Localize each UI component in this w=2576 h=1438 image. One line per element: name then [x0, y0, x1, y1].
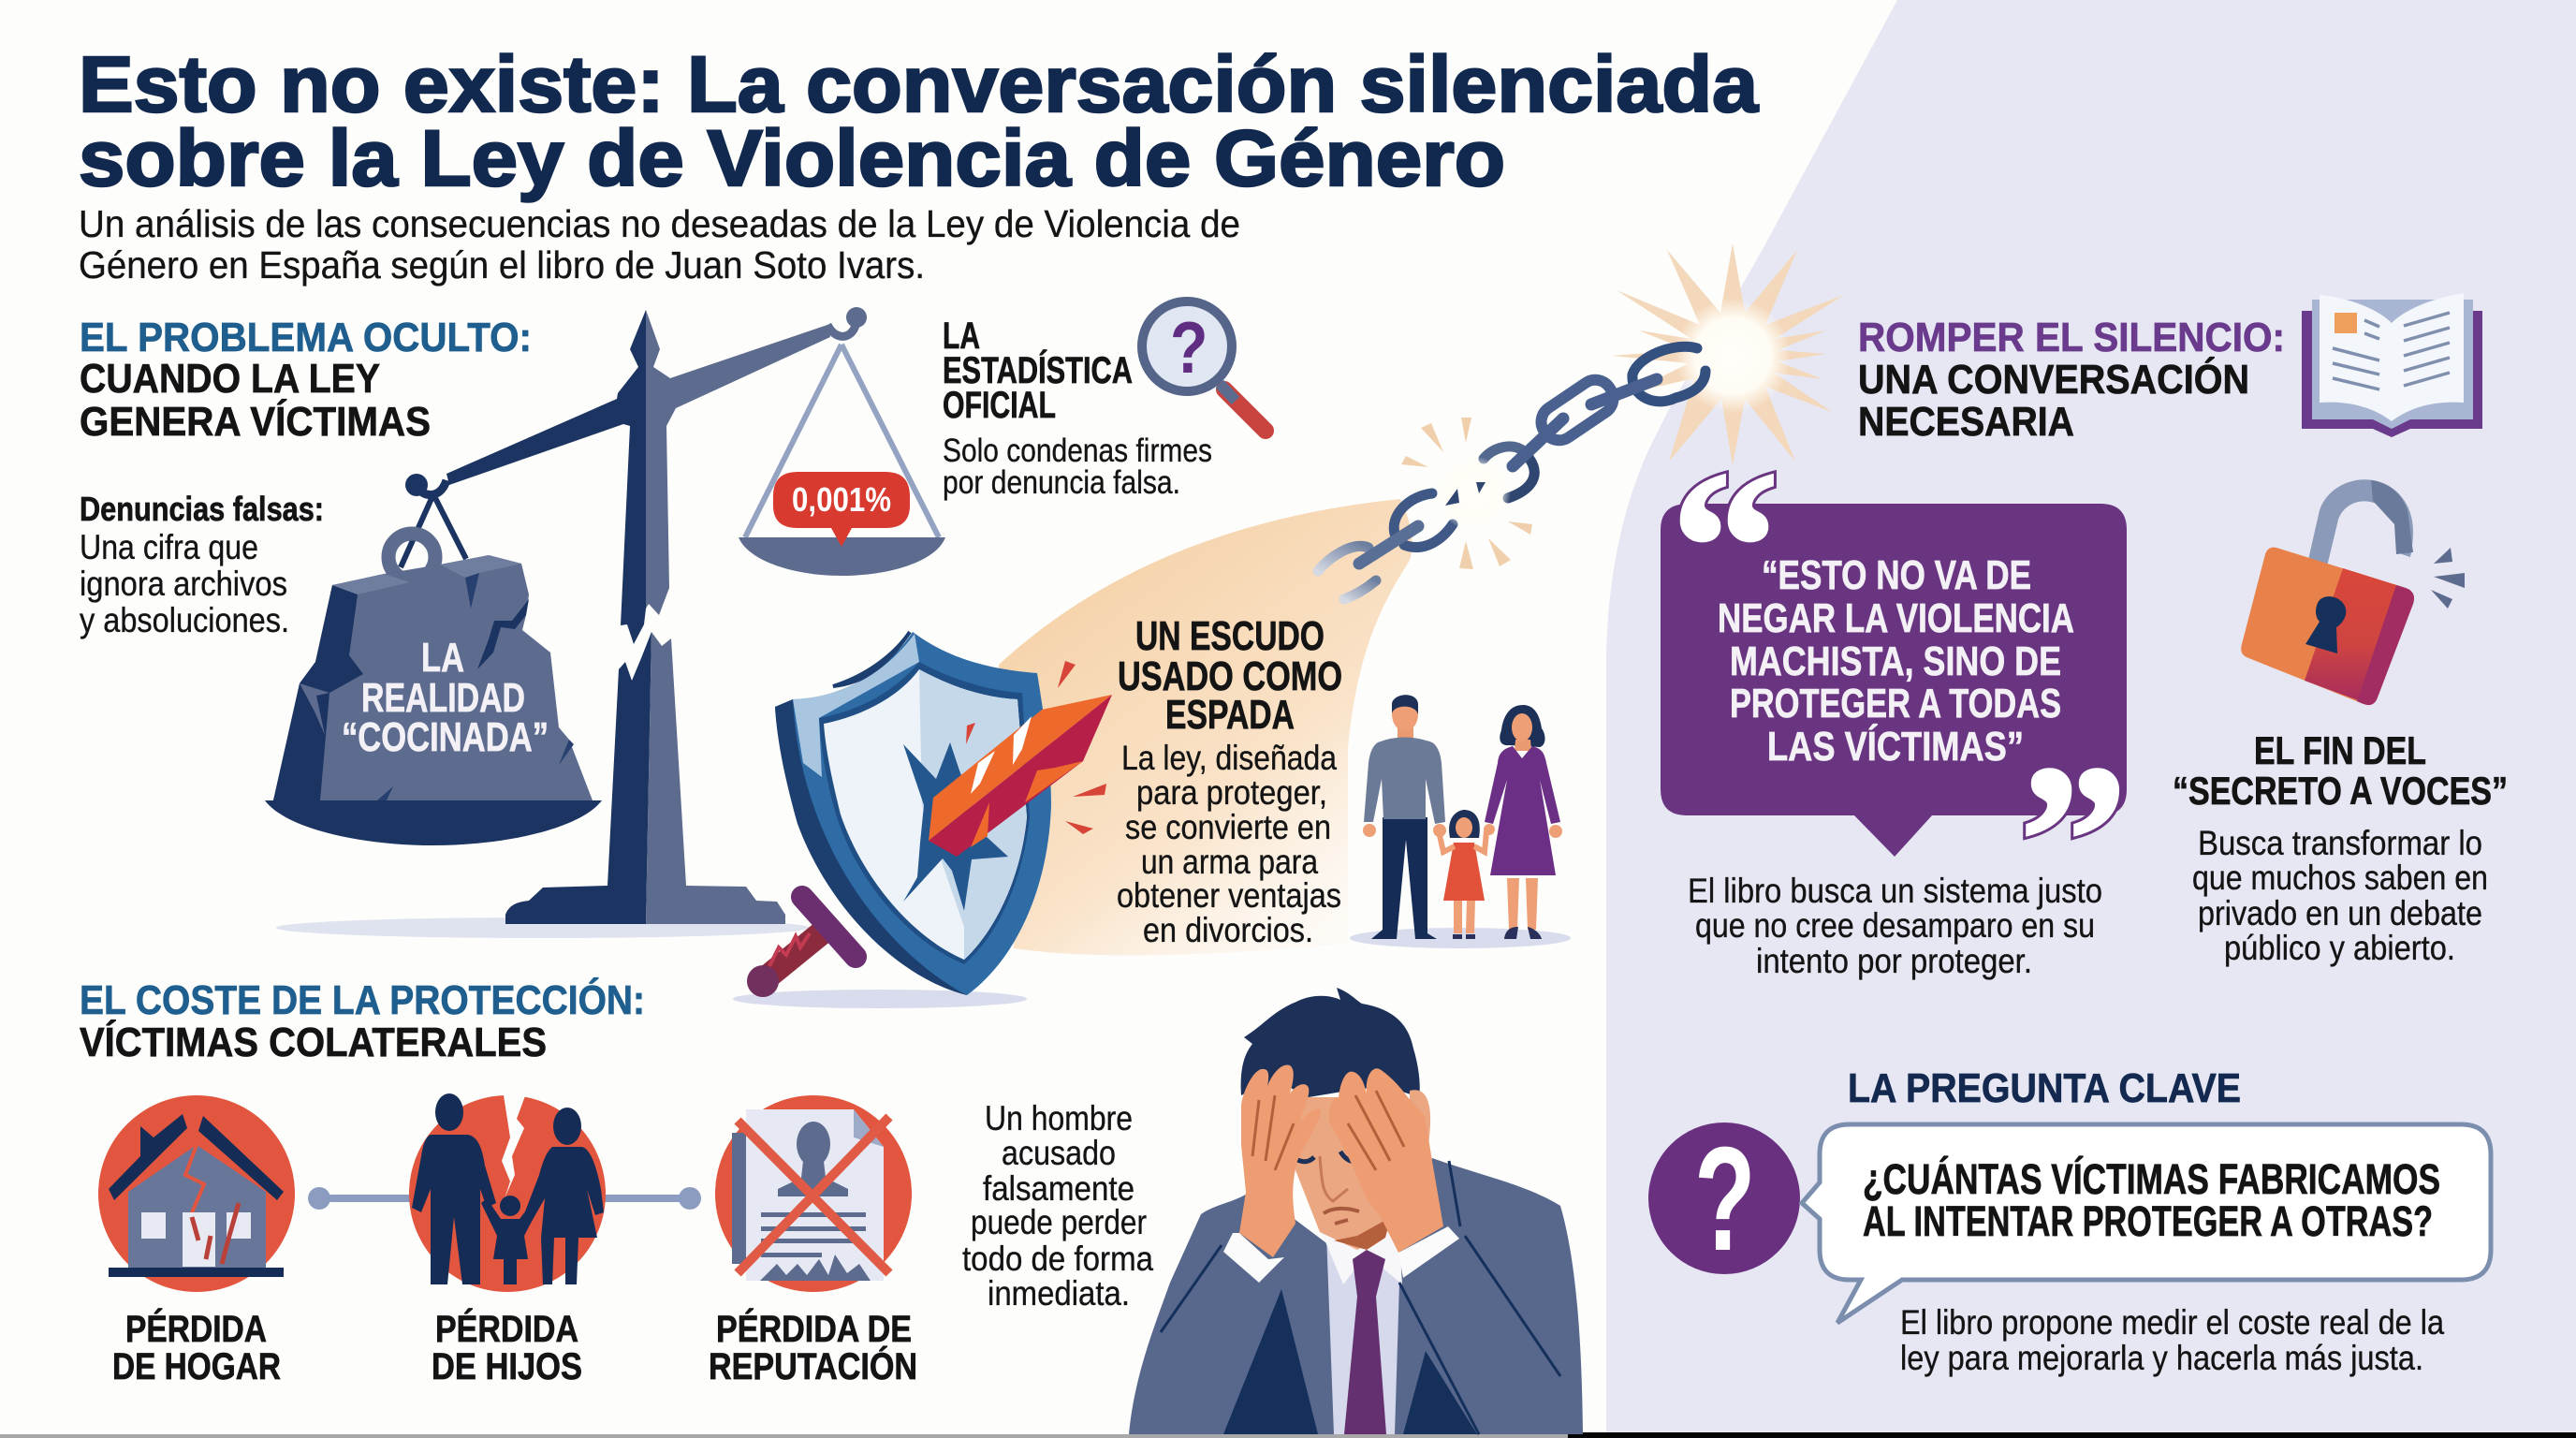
subtitle: Género en España según el libro de Juan Soto Ivars.	[79, 243, 925, 286]
panel: lavender background	[1606, 0, 2576, 1438]
speech bubble with question	[1802, 1124, 2491, 1323]
text: denuncias falsas: ignora archivos	[80, 565, 287, 603]
heading: romper el silencio: UNA CONVERSACIÓN	[1858, 356, 2249, 403]
text: un escudo usado como espada: en divorcios.	[1143, 911, 1313, 949]
text: un escudo usado como espada: se convierte en	[1125, 808, 1331, 846]
badge: 0,001%	[773, 472, 910, 547]
label: pérdida de hijos	[432, 1308, 582, 1387]
illustration: tilted scale with rock weight	[265, 307, 945, 938]
icon: open padlock	[2241, 479, 2465, 705]
title	[79, 40, 1759, 202]
callout: purple quote box: NEGAR LA VIOLENCIA	[1718, 595, 2074, 641]
text: un hombre acusado: todo de forma	[962, 1240, 1153, 1278]
heading: el problema oculto: CUANDO LA LEY	[80, 356, 380, 402]
title: sobre la Ley de Violencia de Género	[79, 114, 1505, 202]
heading: romper el silencio	[1858, 315, 2285, 445]
connector lines	[308, 1187, 701, 1210]
text: un hombre acusado: Un hombre	[985, 1099, 1133, 1137]
text: un escudo usado como espada: La ley, diseñada	[1121, 739, 1337, 777]
label: pérdida de reputación: PÉRDIDA DE	[716, 1308, 912, 1350]
icon: open book	[2302, 293, 2482, 437]
text: el fin del secreto a voces: EL FIN DEL	[2254, 728, 2426, 772]
text: un escudo usado como espada: USADO COMO	[1118, 653, 1342, 699]
text: denuncias falsas	[80, 490, 324, 639]
weight label	[342, 635, 549, 760]
text: la estadística oficial: OFICIAL	[943, 385, 1056, 426]
weight label: REALIDAD	[361, 675, 525, 721]
text: denuncias falsas: Denuncias falsas:	[80, 490, 324, 528]
text: la estadística oficial: ESTADÍSTICA	[943, 349, 1133, 391]
subtitle	[79, 202, 1240, 286]
illustration: distressed man in suit	[1129, 988, 1583, 1434]
label: pérdida de hogar: DE HOGAR	[112, 1346, 281, 1387]
text: denuncias falsas: y absoluciones.	[80, 601, 289, 639]
text: un hombre acusado	[962, 1099, 1153, 1313]
text: un escudo usado como espada: ESPADA	[1165, 692, 1295, 738]
bottom edge bar	[0, 1432, 2576, 1438]
icon: spark at chain break	[1401, 418, 1532, 569]
heading: el coste de la protección: EL COSTE DE LA PROTECCIÓN:	[80, 976, 645, 1023]
badge: 0,001%: 0,001%	[792, 480, 891, 519]
text: el fin del secreto a voces: público y abierto.	[2224, 929, 2455, 967]
label: pérdida de hijos: DE HIJOS	[432, 1346, 582, 1387]
text: un escudo usado como espada: obtener ventajas	[1117, 876, 1341, 915]
heading: el problema oculto	[80, 315, 532, 445]
heading: romper el silencio: NECESARIA	[1858, 399, 2074, 445]
text: el libro propone: El libro propone medir el coste real de la	[1900, 1303, 2444, 1342]
subtitle: Un análisis de las consecuencias no deseadas de la Ley de Violencia de	[79, 202, 1240, 245]
text: un escudo usado como espada: para proteger,	[1136, 773, 1327, 812]
text: el fin del secreto a voces: Busca transformar lo	[2198, 824, 2482, 862]
callout: purple quote box: MACHISTA, SINO DE	[1730, 638, 2061, 684]
callout: purple quote box	[1661, 427, 2128, 961]
illustration: family	[1350, 695, 1571, 948]
label: pérdida de hijos: PÉRDIDA	[435, 1308, 578, 1350]
text: un escudo usado como espada	[1117, 613, 1342, 949]
text: el libro busca: El libro busca un sistema justo	[1688, 872, 2102, 910]
label: pérdida de reputación	[709, 1308, 917, 1387]
orange background arc	[999, 499, 1412, 955]
text: denuncias falsas: Una cifra que	[80, 528, 258, 566]
label: pérdida de reputación: REPUTACIÓN	[709, 1344, 917, 1387]
heading: el problema oculto: GENERA VÍCTIMAS	[80, 398, 431, 445]
text: el fin del secreto a voces	[2173, 728, 2508, 967]
title: Esto no existe: La conversación silenciada	[79, 40, 1759, 128]
text: el fin del secreto a voces: “SECRETO A VOCES”	[2173, 769, 2508, 813]
heading: el problema oculto: EL PROBLEMA OCULTO:	[80, 315, 532, 360]
icon: cracked shield with sword	[733, 632, 1112, 1008]
text: un escudo usado como espada: un arma para	[1141, 843, 1318, 881]
callout: purple quote box: ”	[2019, 721, 2128, 961]
icon: magnifier with question mark	[1142, 301, 1266, 431]
heading: romper el silencio: ROMPER EL SILENCIO:	[1858, 315, 2285, 360]
text: un hombre acusado: puede perder	[971, 1203, 1147, 1241]
text: un hombre acusado: inmediata.	[988, 1274, 1130, 1313]
heading: la pregunta clave: LA PREGUNTA CLAVE	[1848, 1065, 2241, 1111]
callout: purple quote box: “	[1671, 427, 1779, 668]
text: la estadística oficial: Solo condenas firmes	[943, 433, 1212, 469]
text: el libro propone	[1900, 1303, 2444, 1377]
weight label: LA	[421, 635, 464, 681]
callout: purple quote box: LAS VÍCTIMAS”	[1767, 723, 2024, 770]
label: pérdida de hogar: PÉRDIDA	[125, 1308, 267, 1350]
text: el libro busca: que no cree desamparo en su	[1695, 906, 2095, 945]
text: el libro busca: intento por proteger.	[1756, 942, 2032, 980]
text: la estadística oficial	[943, 315, 1212, 501]
text: la estadística oficial: por denuncia falsa.	[943, 464, 1180, 501]
text: un hombre acusado: falsamente	[983, 1169, 1134, 1208]
text: el fin del secreto a voces: privado en un debate	[2198, 894, 2482, 932]
callout: purple quote box: “	[1671, 427, 1779, 668]
text: el libro busca	[1688, 872, 2102, 980]
weight label: “COCINADA”	[342, 714, 549, 760]
icon: purple question circle: ?	[1694, 1116, 1756, 1282]
icon: loss of reputation	[715, 1095, 912, 1292]
icon: magnifier with question mark: ?	[1170, 307, 1208, 389]
icon: burst	[1612, 243, 1844, 465]
icon: purple question circle	[1648, 1116, 1800, 1282]
text: la estadística oficial: LA	[943, 315, 980, 357]
callout: purple quote box: PROTEGER A TODAS	[1730, 681, 2061, 726]
callout: purple quote box: “ESTO NO VA DE	[1762, 552, 2031, 598]
text: el fin del secreto a voces: que muchos saben en	[2192, 858, 2488, 897]
icon: broken chain	[1318, 346, 1705, 599]
label: pérdida de hogar	[112, 1308, 281, 1387]
icon: loss of home	[98, 1095, 295, 1292]
text: un hombre acusado: acusado	[1002, 1134, 1116, 1172]
heading: el coste de la protección	[80, 976, 645, 1065]
text: un escudo usado como espada: UN ESCUDO	[1135, 613, 1325, 659]
icon: loss of children	[409, 1093, 606, 1292]
heading: el coste de la protección: VÍCTIMAS COLATERALES	[80, 1019, 547, 1065]
callout: purple quote box: ”	[2019, 721, 2128, 961]
text: el libro propone: ley para mejorarla y hacerla más justa.	[1900, 1339, 2423, 1377]
